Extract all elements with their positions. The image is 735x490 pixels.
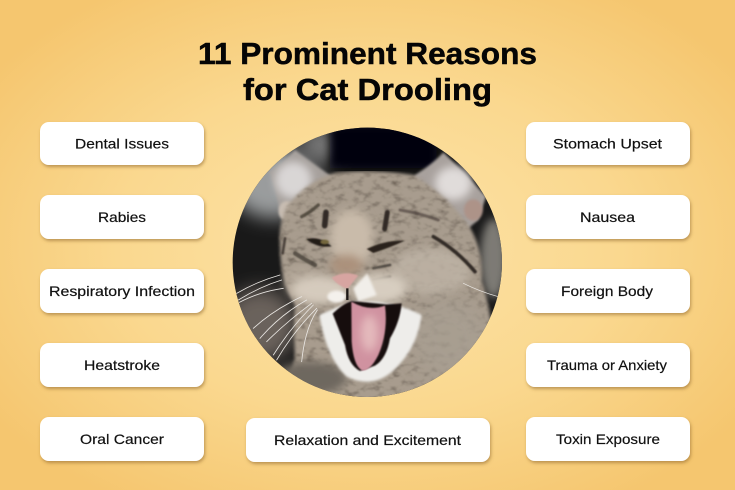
label: Foreign Body (526, 269, 690, 313)
title (198, 36, 537, 107)
head and body (273, 171, 497, 400)
label: Dental Issues (40, 122, 204, 165)
nose (332, 273, 358, 289)
label: Oral Cancer: Oral Cancer (80, 431, 164, 447)
label: Relaxation and Excitement: Relaxation and Excitement (274, 432, 461, 448)
nose bridge (331, 255, 363, 275)
label: Stomach Upset (526, 122, 690, 165)
tongue (351, 302, 386, 370)
label: Relaxation and Excitement (246, 418, 490, 462)
whiskers (237, 275, 498, 362)
label: Respiratory Infection (40, 269, 204, 313)
label: Heatstroke (40, 343, 204, 387)
label: Nausea: Nausea (580, 209, 635, 225)
mouth (333, 301, 402, 371)
photo: yawning tabby cat (223, 125, 507, 400)
muzzle (292, 276, 348, 304)
label: Trauma or Anxiety (526, 343, 690, 387)
label: Toxin Exposure: Toxin Exposure (556, 431, 660, 447)
ears (270, 149, 331, 208)
label: Rabies: Rabies (98, 209, 146, 225)
title: 11 Prominent Reasons (198, 36, 537, 71)
label: Nausea (526, 195, 690, 239)
label: Oral Cancer (40, 417, 204, 461)
label: Respiratory Infection: Respiratory Infection (49, 283, 195, 299)
label: Toxin Exposure (526, 417, 690, 461)
label: Dental Issues: Dental Issues (75, 136, 169, 152)
label: Heatstroke: Heatstroke (84, 357, 160, 373)
white chin (319, 301, 422, 382)
label: Foreign Body: Foreign Body (561, 283, 653, 299)
label: Trauma or Anxiety: Trauma or Anxiety (547, 357, 667, 373)
eyes (306, 238, 332, 247)
tabby stripes (283, 205, 475, 280)
title: for Cat Drooling (243, 72, 492, 107)
label: Stomach Upset: Stomach Upset (553, 136, 662, 152)
label: Rabies (40, 195, 204, 239)
